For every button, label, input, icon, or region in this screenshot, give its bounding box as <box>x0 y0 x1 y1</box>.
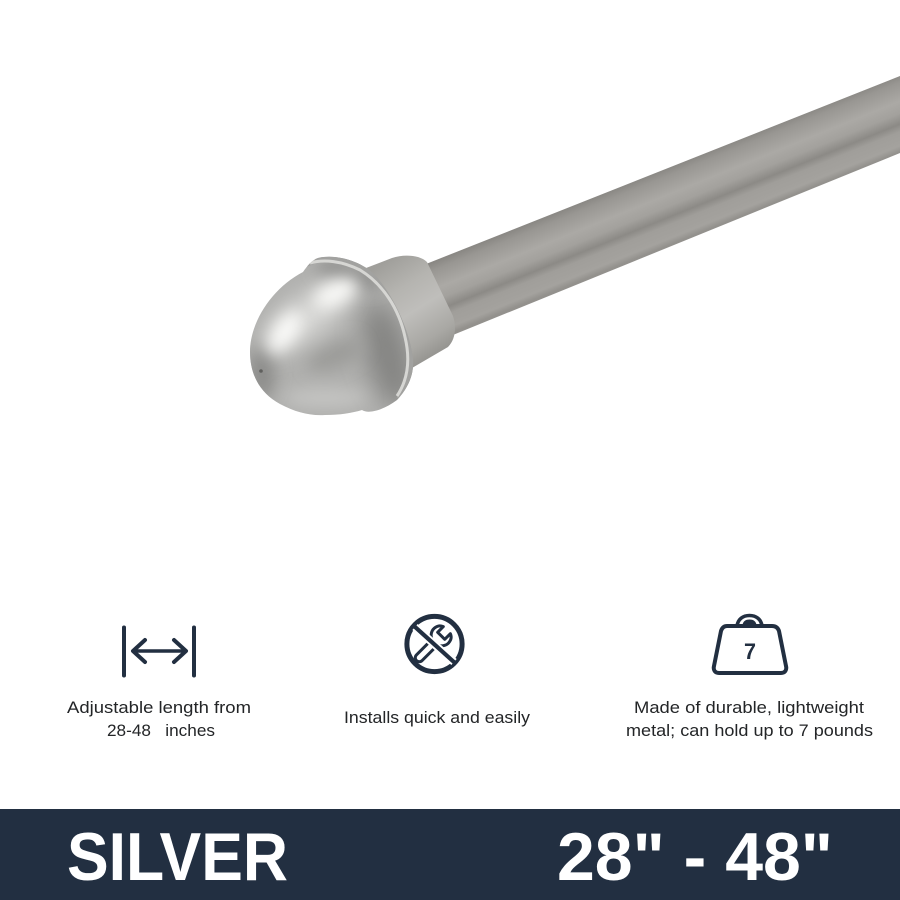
color name: SILVER <box>67 819 288 895</box>
end cap dome <box>249 255 423 415</box>
text: adjustable length <box>67 698 251 740</box>
icon: 7 pound weight: 7 <box>744 639 756 664</box>
size range: 28" - 48" <box>557 819 833 895</box>
feature: weight capacity <box>626 616 873 740</box>
icon: 7 pound weight <box>714 616 786 673</box>
cap flange rim <box>306 259 411 399</box>
text: durable metal: metal; can hold up to 7 pounds <box>626 721 873 740</box>
text: durable metal: Made of durable, lightweight <box>634 698 864 717</box>
icon: width arrows <box>124 628 194 676</box>
cap tip hole <box>259 369 263 373</box>
product photo: silver curtain rod with end cap <box>249 76 900 415</box>
icon: crossed-out wrench <box>407 616 462 672</box>
rod collar <box>366 256 455 368</box>
text: installs quick: Installs quick and easily <box>344 708 531 727</box>
text: adjustable length: 28-48 inches <box>107 721 215 740</box>
text: adjustable length: Adjustable length from <box>67 698 251 717</box>
bottom banner <box>0 809 900 900</box>
rod tube <box>426 76 900 337</box>
text: durable metal <box>626 698 873 740</box>
feature: adjustable length <box>67 628 251 740</box>
feature: quick install <box>344 616 531 727</box>
